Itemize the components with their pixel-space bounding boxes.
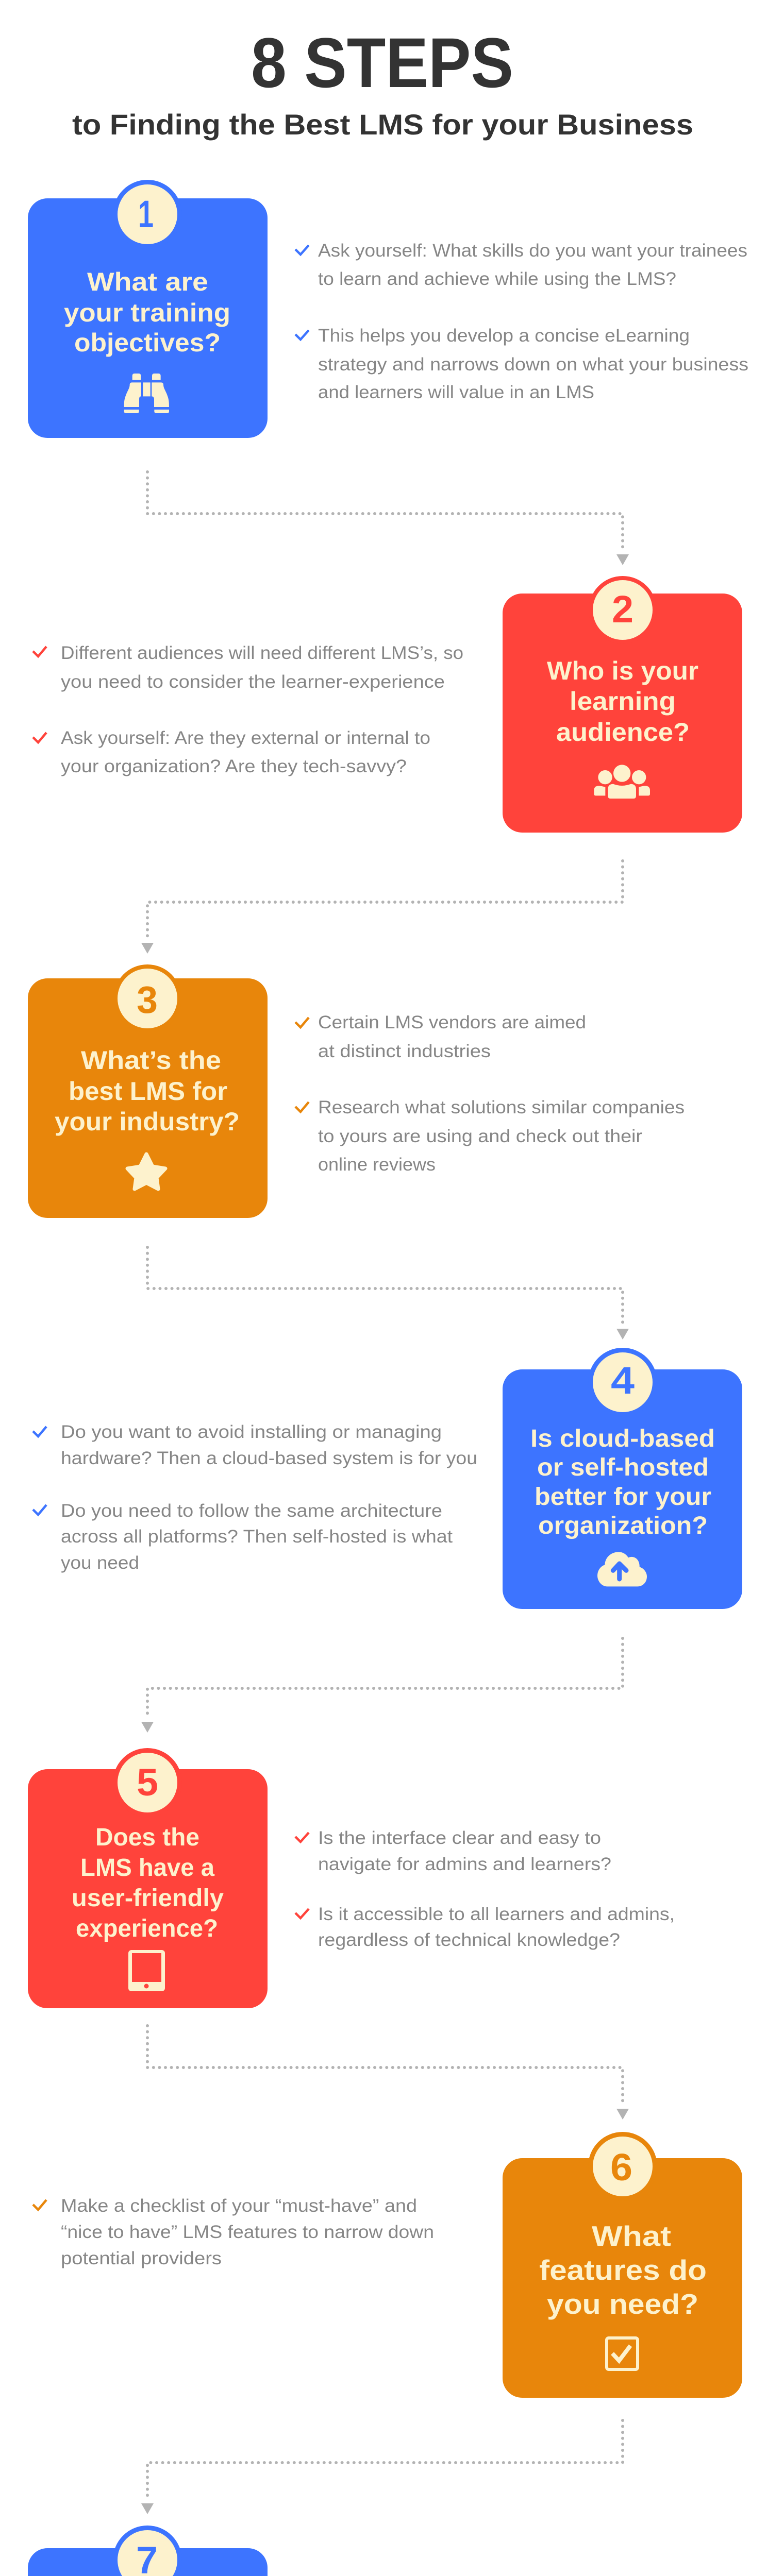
panel: step 4 card [503, 1348, 742, 1609]
icon: checkbox [607, 2338, 638, 2369]
text block: step 2 points: you need to consider the learner-experience [61, 672, 445, 692]
heading: step 3 [55, 1046, 240, 1136]
heading: step 1: objectives? [74, 328, 221, 357]
text block: step 1 points: and learners will value in an LMS [318, 382, 594, 402]
arrow: step 4 to 5 [141, 1638, 623, 1733]
text block: step 4 points: you need [61, 1553, 139, 1573]
icon: check [33, 733, 46, 742]
panel: step 2 card [503, 576, 742, 833]
text block: step 2 points: your organization? Are they tech-savvy? [61, 756, 407, 776]
heading: step 5: Does the [95, 1824, 199, 1851]
text block: step 6 points: “nice to have” LMS features to narrow down [61, 2222, 434, 2242]
icon: check [295, 245, 309, 255]
text block: step 6 points: potential providers [61, 2248, 222, 2268]
text block: step 4 points: across all platforms? Then self-hosted is what [61, 1527, 453, 1547]
heading: step 2 [547, 656, 698, 747]
icon: cloud upload [597, 1552, 647, 1586]
icon: check [33, 1427, 46, 1436]
panel: step 5 card [28, 1748, 268, 2008]
text block: step 6 points [33, 2196, 434, 2268]
heading: step 4: better for your [535, 1483, 711, 1511]
text block: step 3 points [295, 1012, 685, 1175]
text block: step 5 points: Is the interface clear and easy to [318, 1828, 601, 1848]
number 5: 5 [137, 1761, 158, 1804]
heading: step 4: organization? [538, 1512, 708, 1539]
icon: binoculars [124, 374, 169, 413]
panel: step 7 card [28, 2526, 268, 2576]
heading: step 6 [539, 2220, 707, 2320]
arrow: step 5 to 6 [147, 2026, 629, 2120]
icon: star [127, 1154, 165, 1189]
icon: check [295, 1909, 309, 1918]
title: to Finding the Best LMS for your Business [72, 108, 693, 141]
heading: step 4: Is cloud-based [530, 1425, 715, 1452]
heading: step 5: user-friendly [72, 1885, 224, 1912]
icon: check [295, 330, 309, 340]
text block: step 1 points: This helps you develop a concise eLearning [318, 326, 690, 346]
text block: step 5 points: Is it accessible to all learners and admins, [318, 1904, 675, 1924]
heading: step 1: What are [87, 267, 208, 296]
text block: step 2 points: Different audiences will need different LMS’s, so [61, 643, 463, 663]
text block: step 1 points: to learn and achieve while using the LMS? [318, 269, 676, 289]
text block: step 1 points: strategy and narrows down on what your business [318, 354, 748, 375]
text block: step 1 points: Ask yourself: What skills do you want your trainees [318, 241, 747, 261]
heading: step 6: What [592, 2220, 671, 2252]
heading: step 1: your training [64, 298, 230, 327]
number 6: 6 [610, 2146, 632, 2189]
text block: step 3 points: at distinct industries [318, 1041, 491, 1061]
number 4: 4 [611, 1359, 635, 1402]
text block: step 2 points: Ask yourself: Are they external or internal to [61, 728, 430, 748]
number 1: 1 [138, 193, 154, 235]
panel: step 6 card [503, 2132, 742, 2398]
icon: check [33, 1505, 46, 1515]
text block: step 2 points [33, 643, 463, 776]
heading: step 4 [530, 1425, 715, 1539]
panel: step 3 card [28, 964, 268, 1218]
heading: step 5 [72, 1824, 224, 1942]
text block: step 5 points [295, 1828, 675, 1950]
text block: step 4 points: hardware? Then a cloud-based system is for you [61, 1448, 477, 1468]
text block: step 3 points: to yours are using and check out their [318, 1126, 642, 1146]
number 2: 2 [612, 588, 633, 631]
heading: step 4: or self-hosted [537, 1454, 709, 1481]
text block: step 5 points: regardless of technical knowledge? [318, 1930, 620, 1950]
heading: step 2: learning [570, 687, 676, 716]
heading: step 1 [64, 267, 230, 357]
heading: step 2: audience? [556, 718, 690, 747]
arrow: step 3 to 4 [147, 1247, 629, 1340]
title: 8 STEPS [251, 24, 513, 103]
text block: step 3 points: Certain LMS vendors are aimed [318, 1012, 586, 1032]
text block: step 4 points: Do you need to follow the same architecture [61, 1501, 442, 1521]
text block: step 3 points: Research what solutions similar companies [318, 1097, 685, 1117]
text block: step 6 points: Make a checklist of your “must-have” and [61, 2196, 417, 2216]
heading: step 6: you need? [547, 2288, 698, 2320]
arrow: step 6 to 7 [141, 2420, 623, 2514]
panel: step 1 card [28, 180, 268, 438]
number 3: 3 [137, 978, 158, 1021]
heading: step 5: LMS have a [80, 1854, 214, 1882]
icon: check [33, 2200, 46, 2210]
icon: check [295, 1833, 309, 1842]
icon: check [295, 1102, 309, 1112]
heading: step 3: best LMS for [69, 1077, 227, 1106]
arrow: step 2 to 3 [141, 861, 623, 954]
heading: step 3: your industry? [55, 1107, 240, 1136]
text block: step 4 points: Do you want to avoid installing or managing [61, 1422, 442, 1442]
heading: step 3: What’s the [81, 1046, 221, 1075]
icon: check [295, 1018, 309, 1027]
heading: step 2: Who is your [547, 656, 698, 685]
icon: check [33, 647, 46, 656]
icon: tablet [128, 1950, 165, 1991]
text block: step 1 points [295, 241, 748, 402]
arrow: step 1 to 2 [147, 472, 629, 565]
text block: step 5 points: navigate for admins and learners? [318, 1854, 611, 1874]
heading: step 6: features do [539, 2254, 707, 2286]
text block: step 4 points [33, 1422, 477, 1573]
heading: step 5: experience? [76, 1915, 218, 1942]
icon: people [594, 765, 650, 799]
title [72, 24, 693, 141]
text block: step 3 points: online reviews [318, 1155, 436, 1175]
